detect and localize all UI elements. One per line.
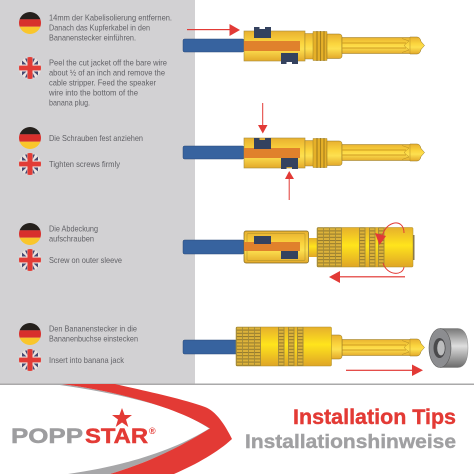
step 1 English text: Peel the cut jacket off the bare wire: [49, 58, 167, 68]
arrow: rotate sleeve: [375, 223, 404, 273]
logo: Poppstar: [11, 408, 156, 448]
step 1 German text: Danach das Kupferkabel in den: [49, 24, 150, 32]
step 1 German flag: [19, 12, 41, 34]
step 1 English text: banana plug.: [49, 98, 90, 108]
swoosh graphic: [53, 384, 232, 474]
logo: Poppstar: STAR: [85, 425, 148, 448]
step 3 UK flag: [19, 249, 41, 271]
step 2 German flag: [19, 127, 41, 149]
step 1 English text: wire into the bottom of the: [48, 88, 138, 98]
step 4 English text: Insert into banana jack: [49, 356, 125, 365]
step 2 German text: Die Schrauben fest anziehen: [49, 134, 143, 143]
connector 1: cable in open plug: [183, 27, 424, 64]
grey instruction panel: [0, 0, 195, 384]
step 1 German text: Bananenstecker einführen.: [49, 34, 136, 42]
step 2 English text: Tighten screws firmly: [49, 160, 121, 169]
step 4 UK flag: [19, 349, 41, 371]
step 1 English text: [48, 58, 167, 108]
step 1 English text: about ½ of an inch and remove the: [49, 68, 165, 78]
step 1 UK flag: [19, 57, 41, 79]
logo: Poppstar: ®: [149, 426, 156, 436]
logo: Poppstar: POPP: [11, 425, 83, 448]
connector 4: assembled plug: [183, 327, 424, 366]
title: Installationshinweise: Installationshinweise: [245, 431, 456, 453]
arrow: push sleeve left: [329, 271, 405, 283]
arrow: insert cable: [187, 24, 240, 36]
step 3 German text: [49, 224, 98, 244]
step 3 German flag: [19, 223, 41, 245]
arrow: screw up: [285, 171, 294, 200]
step 4 German text: Bananenbuchse einstecken: [49, 334, 138, 344]
connector 3: outer sleeve screwed on: [183, 228, 414, 267]
step 1 German text: [49, 14, 172, 42]
step 3 German text: Die Abdeckung: [49, 224, 98, 234]
title: Installation Tips: Installation Tips: [293, 406, 456, 429]
step 4 German flag: [19, 323, 41, 345]
banana jack: [429, 328, 468, 368]
connector 2: tightened screws: [183, 138, 424, 169]
step 1 English text: cable stripper. Feed the speaker: [49, 78, 156, 88]
step 4 German text: [49, 324, 138, 344]
arrow: screw down: [258, 103, 268, 134]
arrow: insert into jack: [346, 364, 423, 376]
step 3 English text: Screw on outer sleeve: [49, 256, 122, 265]
step 4 German text: Den Bananenstecker in die: [49, 324, 137, 334]
step 3 German text: aufschrauben: [49, 234, 94, 244]
step 1 German text: 14mm der Kabelisolierung entfernen.: [49, 14, 172, 22]
step 2 UK flag: [19, 153, 41, 175]
